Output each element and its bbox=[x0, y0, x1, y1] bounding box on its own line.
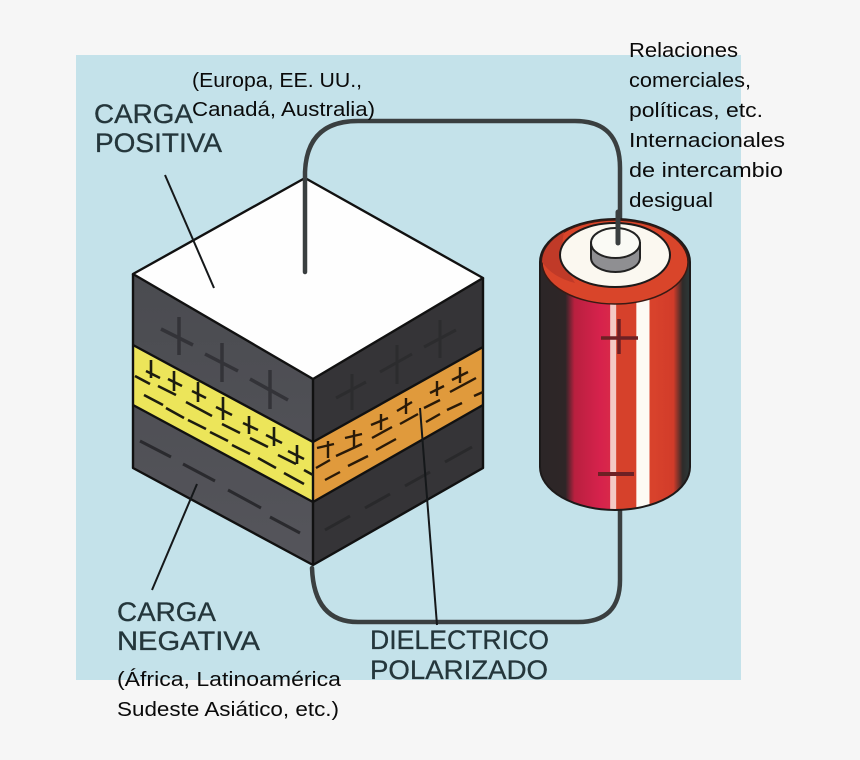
charges on orange layer bbox=[316, 367, 483, 480]
text: relaciones comerciales: de intercambio bbox=[629, 160, 783, 182]
text: africa: (África, Latinoamérica bbox=[117, 668, 342, 691]
label: carga negativa bbox=[117, 597, 260, 656]
label: carga negativa: CARGA bbox=[117, 597, 216, 627]
charges on yellow layer bbox=[135, 360, 313, 484]
leader lines bbox=[152, 175, 437, 625]
label: carga positiva bbox=[94, 99, 222, 158]
label: carga positiva: POSITIVA bbox=[95, 128, 222, 158]
text: africa: Sudeste Asiático, etc.) bbox=[117, 699, 339, 721]
text: europa: (Europa, EE. UU., bbox=[192, 70, 362, 92]
label: dielectrico polarizado: DIELECTRICO bbox=[370, 625, 549, 655]
plus signs on upper right face bbox=[336, 320, 456, 410]
text: europa bbox=[192, 70, 375, 121]
minus signs on lower right face bbox=[325, 447, 472, 530]
capacitor dark left shoulder bbox=[542, 232, 575, 283]
label: dielectrico polarizado: POLARIZADO bbox=[370, 655, 548, 685]
white top disc bbox=[560, 223, 670, 287]
capacitor top rim bbox=[542, 220, 688, 304]
wires bbox=[305, 121, 620, 622]
text: relaciones comerciales: Internacionales bbox=[629, 130, 785, 152]
minus signs on lower left face bbox=[140, 441, 300, 533]
text: relaciones comerciales: Relaciones bbox=[629, 40, 738, 62]
background panel bbox=[76, 55, 741, 680]
cube right face upper layer bbox=[313, 278, 483, 442]
text: relaciones comerciales bbox=[629, 40, 785, 212]
plus signs on upper left face bbox=[161, 317, 288, 409]
terminal cap top bbox=[591, 228, 640, 258]
text: relaciones comerciales: políticas, etc. bbox=[629, 100, 763, 122]
text: relaciones comerciales: desigual bbox=[629, 190, 713, 212]
capacitor body bbox=[540, 219, 690, 510]
label: dielectrico polarizado bbox=[370, 625, 549, 685]
terminal cap side bbox=[591, 243, 640, 272]
terminal wire end bbox=[616, 212, 620, 243]
label: carga negativa: NEGATIVA bbox=[117, 626, 260, 656]
cube top face bbox=[133, 178, 483, 379]
minus sign on capacitor bbox=[598, 472, 634, 476]
yellow dielectric layer bbox=[133, 345, 313, 502]
orange dielectric layer bbox=[313, 347, 483, 502]
cube left face lower layer bbox=[133, 405, 313, 565]
cube left face upper layer bbox=[133, 274, 313, 442]
text: africa bbox=[117, 668, 342, 721]
text: relaciones comerciales: comerciales, bbox=[629, 70, 751, 92]
cube bbox=[133, 178, 483, 565]
cube outlines bbox=[133, 178, 483, 565]
capacitor bbox=[540, 212, 690, 510]
label: carga positiva: CARGA bbox=[94, 99, 193, 129]
plus sign on capacitor bbox=[601, 319, 638, 354]
text: europa: Canadá, Australia) bbox=[192, 99, 375, 121]
cube right face lower layer bbox=[313, 405, 483, 565]
